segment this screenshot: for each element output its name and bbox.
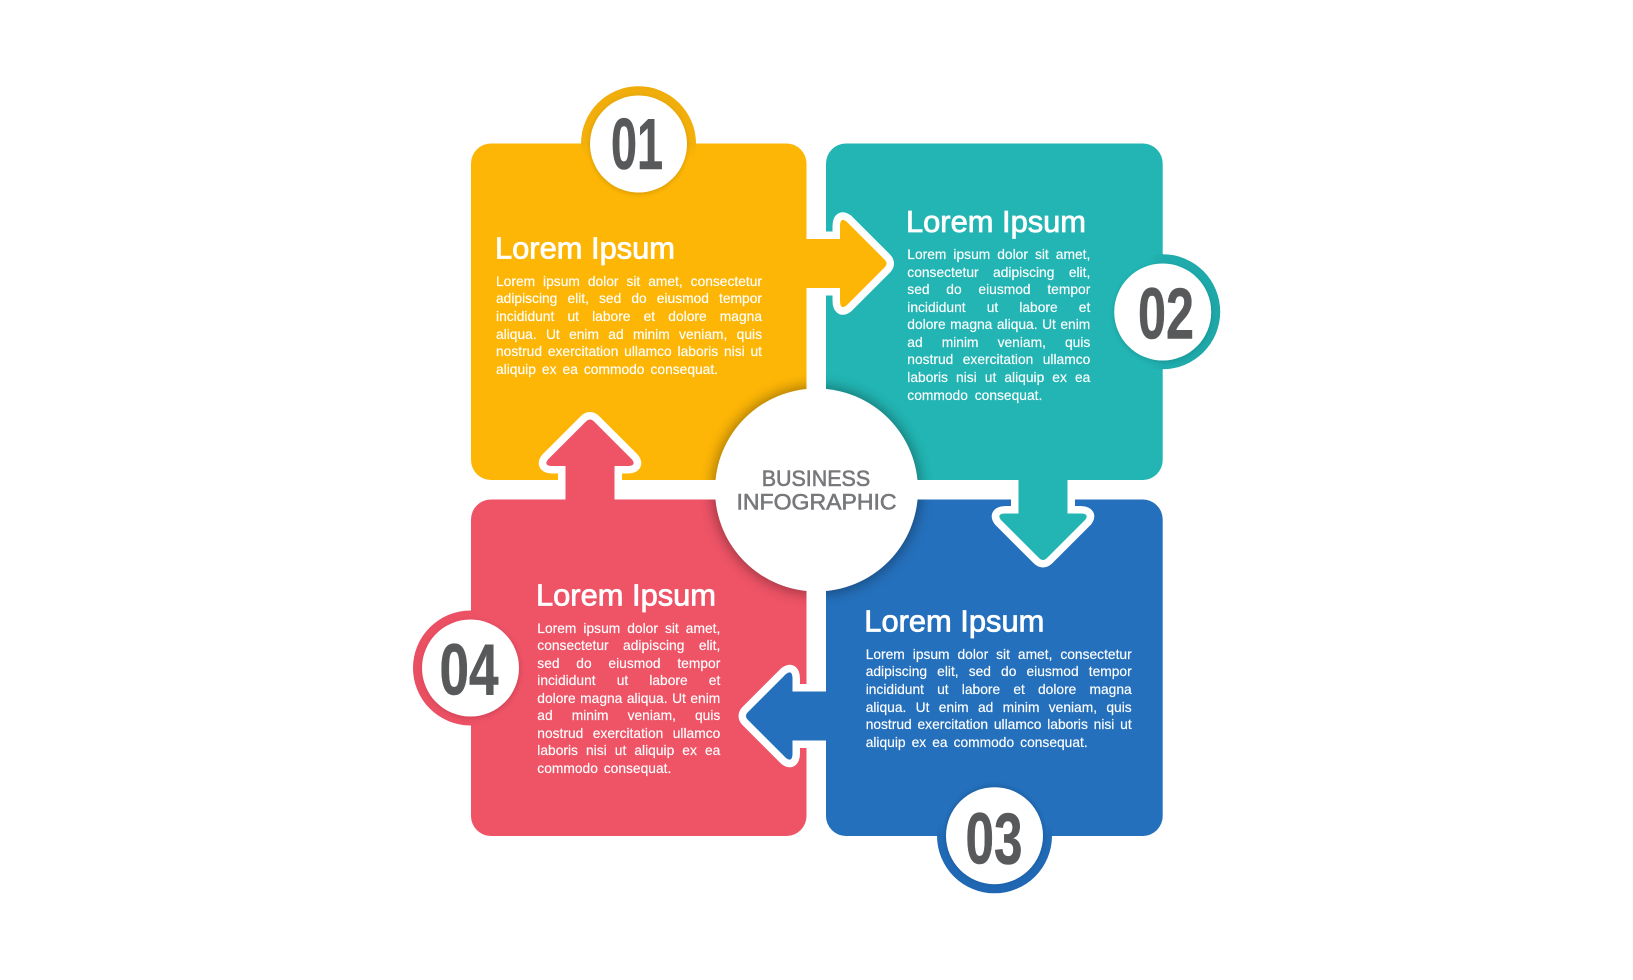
text block: step 2: Lorem ipsum dolor sit amet, — [907, 247, 1090, 262]
text block: step 1: Lorem ipsum dolor sit amet, consectetur — [496, 274, 762, 289]
text block: step 4: nostrud exercitation ullamco — [537, 726, 720, 741]
text block: step 3: aliquip ex ea commodo consequat. — [866, 735, 1088, 750]
text block: step 4: sed do eiusmod tempor — [537, 656, 720, 671]
badge 03 — [937, 778, 1052, 893]
text block: step 2: nostrud exercitation ullamco — [907, 352, 1090, 367]
text block: step 4: dolore magna aliqua. Ut enim — [537, 691, 720, 706]
text block: step 2 — [907, 247, 1090, 404]
badge 01: 01 — [611, 105, 663, 185]
text block: step 2: dolore magna aliqua. Ut enim — [907, 317, 1090, 332]
badge 03: 03 — [966, 799, 1022, 879]
text block: step 3: nostrud exercitation ullamco laboris nisi ut — [866, 717, 1132, 732]
text block: step 1: adipiscing elit, sed do eiusmod tempor — [496, 291, 762, 306]
text block: step 4: laboris nisi ut aliquip ex ea — [537, 743, 720, 758]
badge 04 — [413, 610, 528, 726]
arrow: blue to red — [746, 672, 826, 760]
heading: step 2: Lorem Ipsum — [906, 204, 1086, 239]
center circle shadow — [712, 386, 920, 594]
panel: step 2 teal — [826, 144, 1163, 480]
text block: step 2: commodo consequat. — [907, 388, 1042, 403]
text block: step 3 — [866, 647, 1132, 750]
badge 04: 04 — [440, 630, 498, 710]
center label: INFOGRAPHIC — [736, 490, 896, 514]
center label: BUSINESS — [762, 466, 870, 491]
panel: step 4 red — [471, 500, 806, 836]
text block: step 3: aliqua. Ut enim ad minim veniam, quis — [866, 700, 1132, 715]
text block: step 1: incididunt ut labore et dolore magna — [496, 309, 762, 324]
text block: step 2: sed do eiusmod tempor — [907, 282, 1090, 297]
heading: step 3: Lorem Ipsum — [864, 603, 1044, 638]
text block: step 1: aliquip ex ea commodo consequat. — [496, 362, 718, 377]
text block: step 4: Lorem ipsum dolor sit amet, — [537, 621, 720, 636]
text block: step 4 — [537, 621, 720, 776]
text block: step 1: aliqua. Ut enim ad minim veniam, quis — [496, 327, 762, 342]
arrow: red to yellow — [546, 420, 634, 500]
text block: step 2: ad minim veniam, quis — [907, 335, 1090, 350]
heading: step 1: Lorem Ipsum — [495, 231, 675, 266]
arrow: teal to blue — [999, 480, 1087, 560]
panel: step 1 yellow — [471, 144, 806, 480]
text block: step 2: laboris nisi ut aliquip ex ea — [907, 370, 1090, 385]
text block: step 4: incididunt ut labore et — [537, 673, 720, 688]
text block: step 3: adipiscing elit, sed do eiusmod tempor — [866, 664, 1132, 679]
diagram shapes — [413, 86, 1220, 894]
panel: step 3 blue — [826, 500, 1163, 836]
text block: step 2: consectetur adipiscing elit, — [907, 265, 1090, 280]
infographic canvas — [413, 86, 1220, 894]
text block: step 4: consectetur adipiscing elit, — [537, 638, 720, 653]
badge 02 — [1105, 254, 1220, 369]
text block: step 3: incididunt ut labore et dolore magna — [866, 682, 1132, 697]
text block: step 1: nostrud exercitation ullamco laboris nisi ut — [496, 344, 762, 359]
text block: step 2: incididunt ut labore et — [907, 300, 1090, 315]
arrow: yellow to teal — [806, 220, 886, 307]
text block: step 4: commodo consequat. — [537, 761, 671, 776]
text block: step 4: ad minim veniam, quis — [537, 708, 720, 723]
center circle — [715, 388, 918, 592]
badge 02: 02 — [1138, 274, 1194, 354]
heading: step 4: Lorem Ipsum — [536, 577, 716, 612]
text block: step 3: Lorem ipsum dolor sit amet, consectetur — [866, 647, 1132, 662]
center label — [736, 466, 896, 514]
text block: step 1 — [496, 274, 762, 378]
badge 01 — [581, 86, 696, 201]
